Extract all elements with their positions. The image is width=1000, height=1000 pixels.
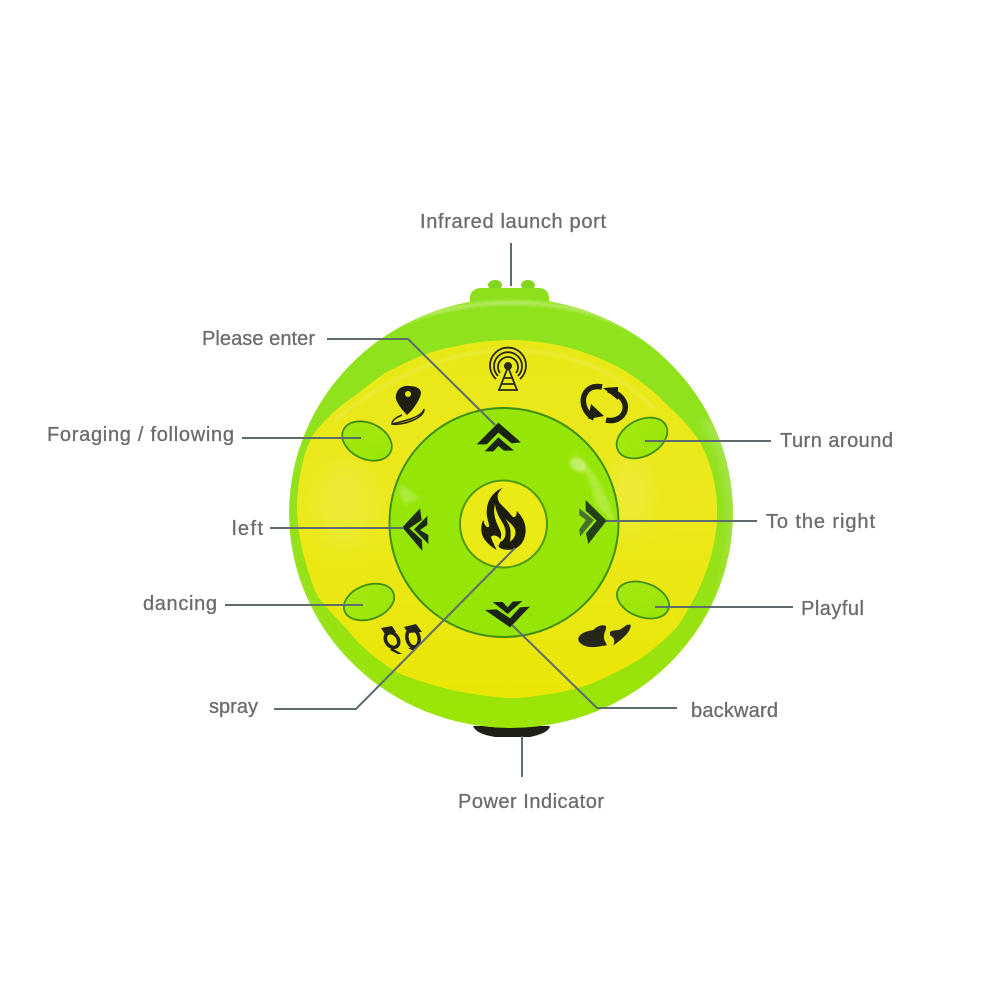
- callout: To the right: To the right: [766, 511, 875, 533]
- callout: Power Indicator: Power Indicator: [458, 791, 604, 813]
- power indicator base: [473, 726, 550, 737]
- icon: chevron right: [579, 500, 607, 544]
- panel glow right: [610, 455, 650, 535]
- inner green dial: [390, 408, 618, 637]
- icon: antenna tower: [490, 348, 526, 390]
- callout: Playful: Playful: [801, 598, 864, 620]
- icon: flame: [481, 488, 526, 550]
- dial highlight left: [400, 483, 420, 505]
- button: foraging: [336, 414, 398, 468]
- yellow panel: [297, 340, 717, 698]
- device: toy remote control: [280, 280, 740, 737]
- icon: footprints: [381, 624, 422, 654]
- center spray button: [460, 480, 547, 568]
- icon: chevron left: [402, 508, 428, 551]
- callout: Infrared launch port: Infrared launch port: [420, 211, 606, 233]
- callout: spray: [209, 548, 515, 718]
- panel glow left: [315, 460, 375, 550]
- callout: Turn around: Turn around: [780, 430, 893, 452]
- icon: chevron up: [477, 423, 521, 451]
- body rim highlight: [385, 303, 640, 335]
- callout: dancing: dancing: [143, 593, 217, 615]
- dial highlight right: [570, 450, 616, 525]
- button: turn around: [610, 409, 674, 467]
- outer body: [280, 298, 740, 735]
- infrared port nub: [470, 280, 549, 302]
- callout: Please enter: [202, 328, 495, 425]
- panel highlight: [335, 350, 655, 420]
- callout: Please enter: Please enter: [202, 328, 315, 350]
- icon: rotate arrows: [583, 386, 625, 421]
- callout: left: left: [232, 518, 263, 540]
- icon: chevron down: [485, 601, 530, 627]
- body shading right: [700, 416, 733, 616]
- icon: hearts: [578, 624, 631, 647]
- button: dancing: [339, 577, 399, 627]
- body shading lower left: [292, 546, 420, 709]
- dial glare right: [567, 455, 589, 475]
- callout: spray: spray: [209, 696, 258, 718]
- callout: backward: [512, 625, 778, 722]
- icon: location pin: [392, 386, 424, 424]
- callout: backward: backward: [691, 700, 778, 722]
- callout: Foraging / following: Foraging / following: [47, 424, 234, 446]
- button: playful: [612, 575, 674, 625]
